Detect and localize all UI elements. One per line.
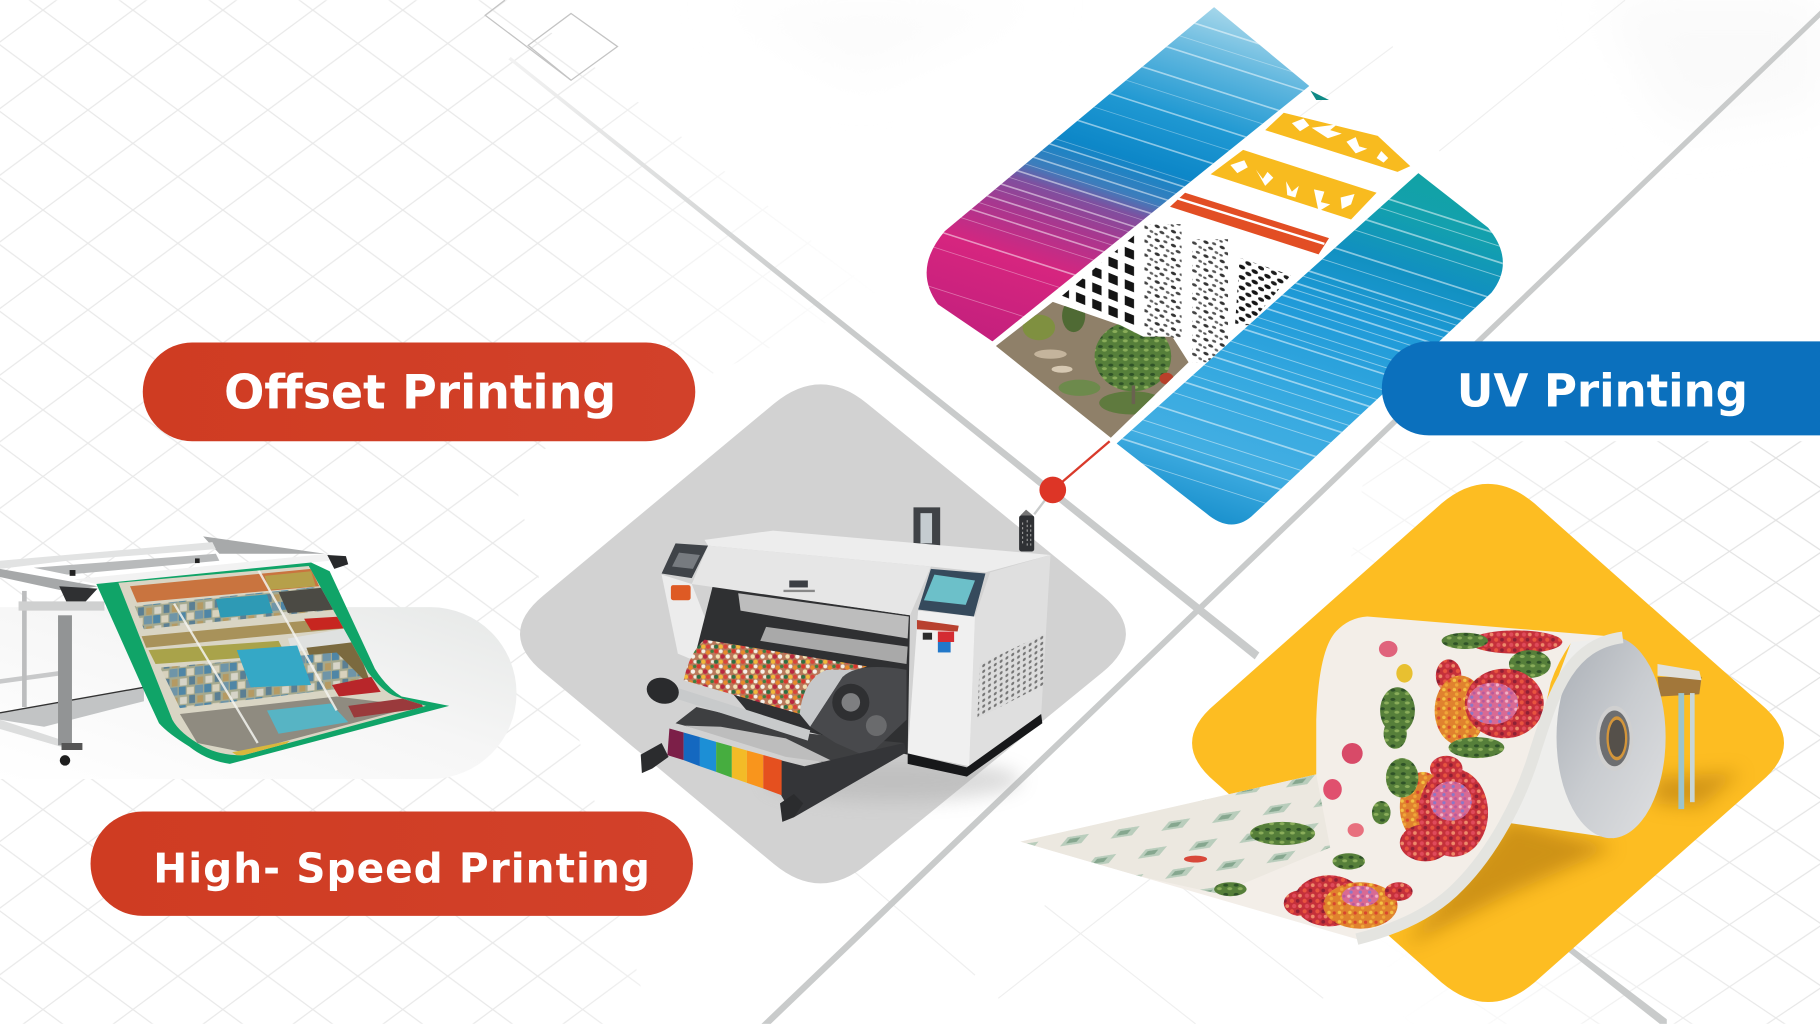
left grey pill backdrop [0, 607, 517, 779]
yellow strip with white figures [1211, 150, 1377, 220]
left foot [641, 743, 669, 773]
roll body [1510, 636, 1613, 838]
colour swatch bar [667, 728, 782, 795]
printer shadow [766, 759, 1021, 801]
paper tray [685, 726, 838, 764]
black roller knob [644, 674, 682, 707]
pill: UV Printing: UV Printing [1457, 364, 1748, 417]
black base [908, 714, 1042, 777]
roll core [1596, 706, 1633, 771]
yellow strip with white figures [1265, 113, 1410, 172]
control labels [917, 620, 959, 652]
teal corner fleck [1310, 91, 1329, 100]
ink cylinder on top [1019, 510, 1034, 551]
interior lower strip [760, 627, 908, 664]
garden photo [996, 302, 1188, 438]
tower front [908, 611, 975, 766]
upper gradient stripes [926, 7, 1310, 342]
printer machine [641, 507, 1050, 822]
roll shadow [1404, 818, 1613, 946]
black lattice pattern [1057, 235, 1135, 327]
interior cavity [696, 586, 910, 755]
lower gradient stripes [1116, 173, 1503, 524]
interior light panel [738, 593, 909, 639]
pill: Offset Printing [143, 343, 695, 441]
roll end face [1557, 636, 1666, 838]
green sheet [96, 562, 449, 764]
red connector dot and line [1034, 441, 1110, 514]
paper edge [1357, 637, 1623, 939]
left console [662, 543, 708, 578]
halftone column [1192, 239, 1228, 362]
left column [662, 575, 713, 663]
left console screen [672, 553, 700, 569]
floral print [1020, 630, 1562, 929]
top surface [705, 531, 1050, 572]
touch screen [924, 575, 975, 605]
floral print roller [684, 640, 867, 714]
pill: Offset Printing: Offset Printing [224, 366, 616, 421]
yellow diamond panel [1192, 484, 1784, 1002]
right foot [780, 794, 803, 822]
panel below roller [676, 707, 904, 766]
pill: High-Speed Printing [91, 811, 693, 916]
black and white patterns [1057, 224, 1291, 362]
base frame [781, 743, 907, 817]
paper sheet [1020, 616, 1623, 939]
grey diamond panel [520, 384, 1126, 883]
stand bracket [1658, 664, 1702, 809]
outlined corner diamonds [485, 0, 618, 80]
silver rod [673, 687, 810, 741]
upper front panel [692, 546, 931, 615]
stand shadow [1654, 772, 1741, 807]
offset printing table [0, 536, 449, 766]
emergency stop [671, 585, 691, 600]
pill: UV Printing [1382, 341, 1820, 435]
dense halftone column [1235, 258, 1291, 325]
right side panel [967, 555, 1050, 775]
red double stripe [1170, 193, 1329, 254]
small device on top [913, 507, 940, 547]
colour strip diamond image [926, 7, 1503, 524]
table legs and rails [0, 536, 348, 766]
diagonal lines [508, 11, 1820, 1024]
printed sheet artwork [118, 566, 426, 756]
vent grille [977, 634, 1045, 719]
logo badge [783, 580, 815, 592]
touch screen bezel [918, 569, 985, 616]
silver drum end [800, 670, 872, 727]
halftone column [1144, 224, 1182, 338]
dark gear mechanism [810, 667, 907, 757]
fabric roll on yellow panel [1020, 616, 1741, 946]
pill: High-Speed Printing: High- Speed Printing [153, 844, 650, 892]
